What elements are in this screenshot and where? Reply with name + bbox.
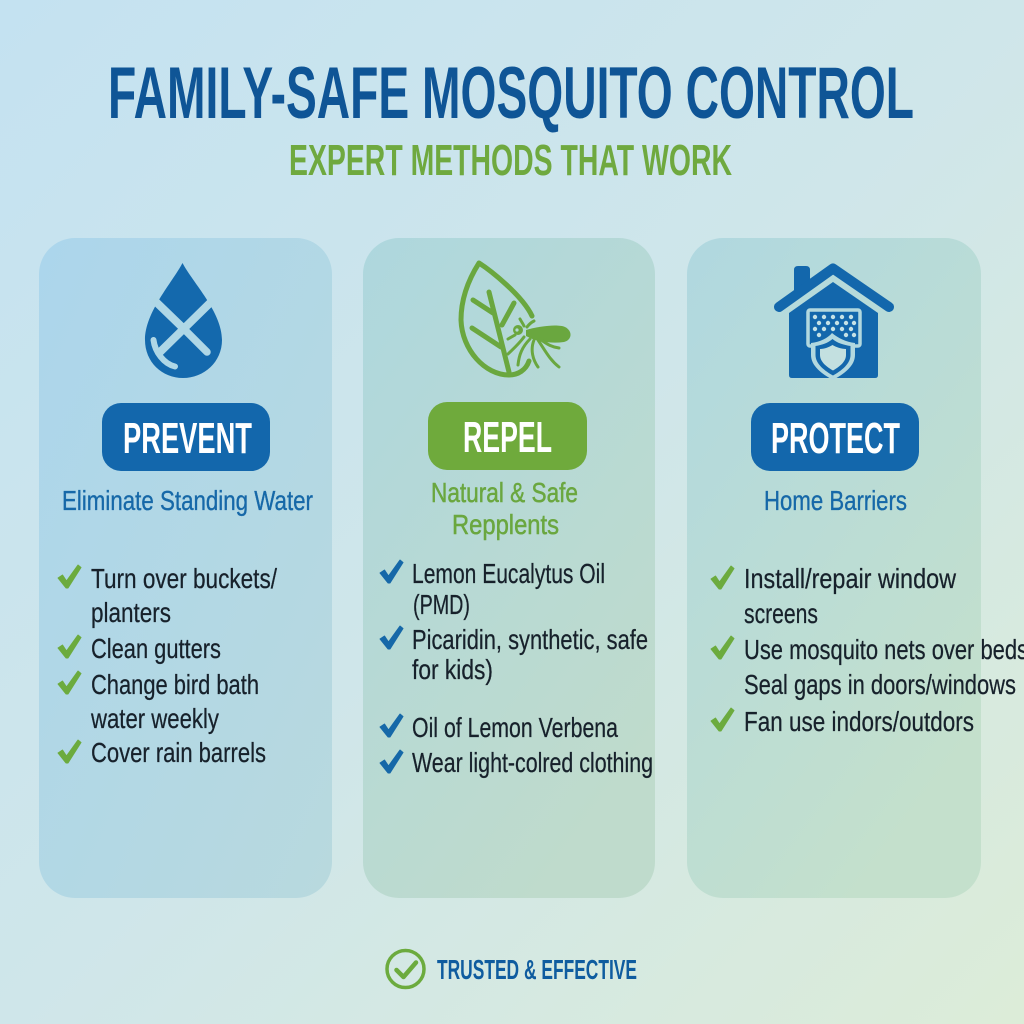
panel: protect (687, 238, 1024, 898)
icon: leaf and mosquito (461, 263, 571, 375)
checklist: prevent: planters (91, 597, 171, 628)
footer text: TRUSTED & EFFECTIVE (437, 954, 637, 985)
checklist: prevent: Change bird bath (91, 669, 259, 700)
subheading: natural and safe repellents: Natural & Safe (431, 477, 578, 508)
checklist: protect: Install/repair window (744, 563, 956, 594)
checklist: prevent: Cover rain barrels (91, 737, 266, 768)
panel: prevent (39, 238, 332, 898)
icon: house with screen and shield (779, 266, 889, 380)
checklist: prevent: water weekly (90, 703, 219, 734)
checklist: prevent: Clean gutters (91, 633, 221, 664)
footer badge: trusted and effective (387, 950, 637, 988)
icon: check circle (387, 950, 424, 988)
subheading: natural and safe repellents (431, 477, 578, 540)
subtitle: EXPERT METHODS THAT WORK (289, 136, 732, 185)
icon: water drop with cross (145, 263, 222, 378)
subheading: eliminate standing water: Eliminate Standing Water (62, 485, 313, 516)
checklist: protect (711, 563, 1024, 737)
badge: prevent (102, 403, 270, 471)
checklist: prevent (58, 563, 277, 768)
badge: repel (428, 402, 587, 470)
subheading: home barriers: Home Barriers (764, 485, 907, 516)
badge: protect (751, 403, 919, 471)
badge: prevent: PREVENT (123, 414, 252, 463)
checklist: protect: screens (744, 598, 818, 629)
checklist: repel: (PMD) (413, 589, 470, 620)
badge: protect: PROTECT (771, 414, 900, 463)
checklist: repel: Lemon Eucalytus Oil (412, 558, 605, 589)
checklist: repel: Picaridin, synthetic, safe (412, 624, 648, 655)
checklist: prevent: Turn over buckets/ (91, 563, 277, 594)
subheading: natural and safe repellents: Repplents (452, 509, 559, 540)
checklist: repel (380, 558, 653, 778)
checklist: protect: Fan use indors/outdors (744, 706, 974, 737)
checklist: repel: Wear light-colred clothing (412, 747, 653, 778)
panel: repel (363, 238, 655, 898)
checklist: repel: Oil of Lemon Verbena (412, 712, 619, 743)
badge: repel: REPEL (463, 413, 552, 462)
checklist: repel: for kids) (412, 654, 493, 685)
